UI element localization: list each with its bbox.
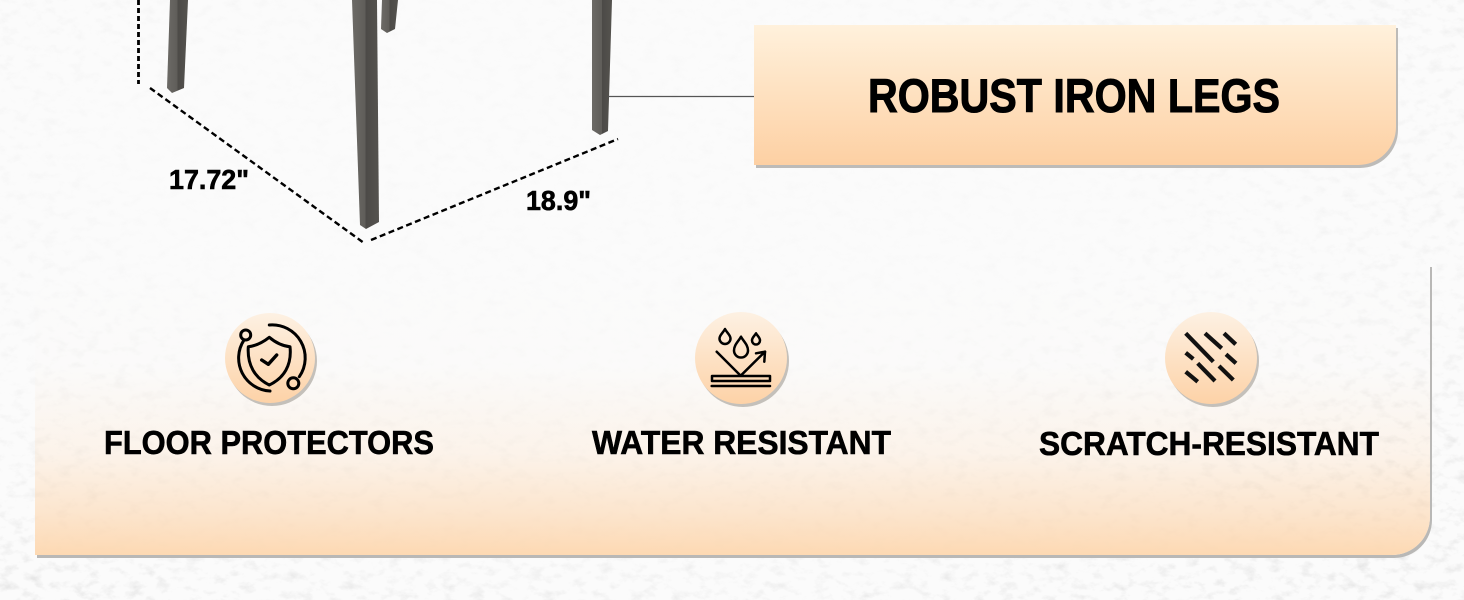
height dimension line	[137, 0, 140, 84]
icon: shield	[225, 313, 317, 406]
callout: robust iron legs: ROBUST IRON LEGS	[868, 69, 1280, 122]
icon: water drops	[695, 312, 789, 407]
icon: scratches	[1165, 312, 1259, 407]
width dimension: 18.9"	[526, 185, 591, 216]
chair legs	[167, 0, 612, 229]
depth dimension: 17.72"	[169, 164, 249, 195]
feature: floor protectors	[104, 313, 434, 461]
feature: water resistant: WATER RESISTANT	[592, 424, 891, 461]
feature: floor protectors: FLOOR PROTECTORS	[104, 424, 434, 461]
feature: scratch-resistant: SCRATCH-RESISTANT	[1039, 425, 1379, 462]
width dimension	[371, 139, 618, 240]
depth dimension	[150, 88, 364, 243]
panel: features	[35, 267, 1432, 558]
connector line	[608, 96, 754, 98]
callout: robust iron legs	[754, 25, 1398, 168]
feature: water resistant	[592, 312, 891, 461]
feature: scratch-resistant	[1039, 312, 1379, 462]
